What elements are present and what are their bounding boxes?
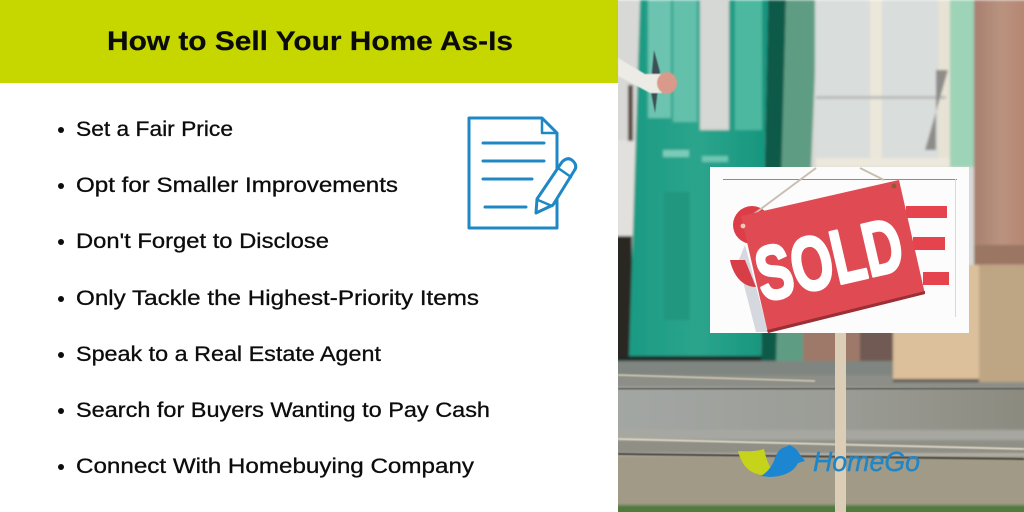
photo: porch with door and sold sign (610, 0, 1024, 512)
hand holding door handle (618, 50, 677, 113)
sign post (835, 330, 846, 512)
red letters behind hanging sign (730, 206, 949, 287)
item: homebuying company: Connect With Homebuying Company (76, 455, 475, 478)
SOLD text: SOLD (748, 202, 911, 318)
logo wordmark: HomeGo (813, 446, 920, 477)
item: real estate agent: Speak to a Real Estate Agent (76, 343, 381, 366)
item: smaller improvements: Opt for Smaller Improvements (76, 174, 398, 197)
icon: document with pencil (469, 118, 576, 228)
porch step highlights (618, 374, 1024, 460)
for-sale sign board (710, 167, 969, 333)
bullet list (58, 118, 490, 478)
title banner (0, 0, 618, 83)
title text: How to Sell Your Home As-Is (107, 26, 513, 56)
red SOLD sign (741, 180, 925, 333)
item: highest-priority items: Only Tackle the Highest-Priority Items (76, 287, 479, 310)
item: set a fair price: Set a Fair Price (76, 118, 233, 141)
hanging string (754, 168, 884, 214)
photo background: porch scene (610, 0, 1024, 512)
item: cash buyers: Search for Buyers Wanting to Pay Cash (76, 399, 490, 422)
item: disclose: Don't Forget to Disclose (76, 230, 329, 253)
logo mark (738, 445, 805, 477)
HomeGo logo (738, 445, 920, 477)
